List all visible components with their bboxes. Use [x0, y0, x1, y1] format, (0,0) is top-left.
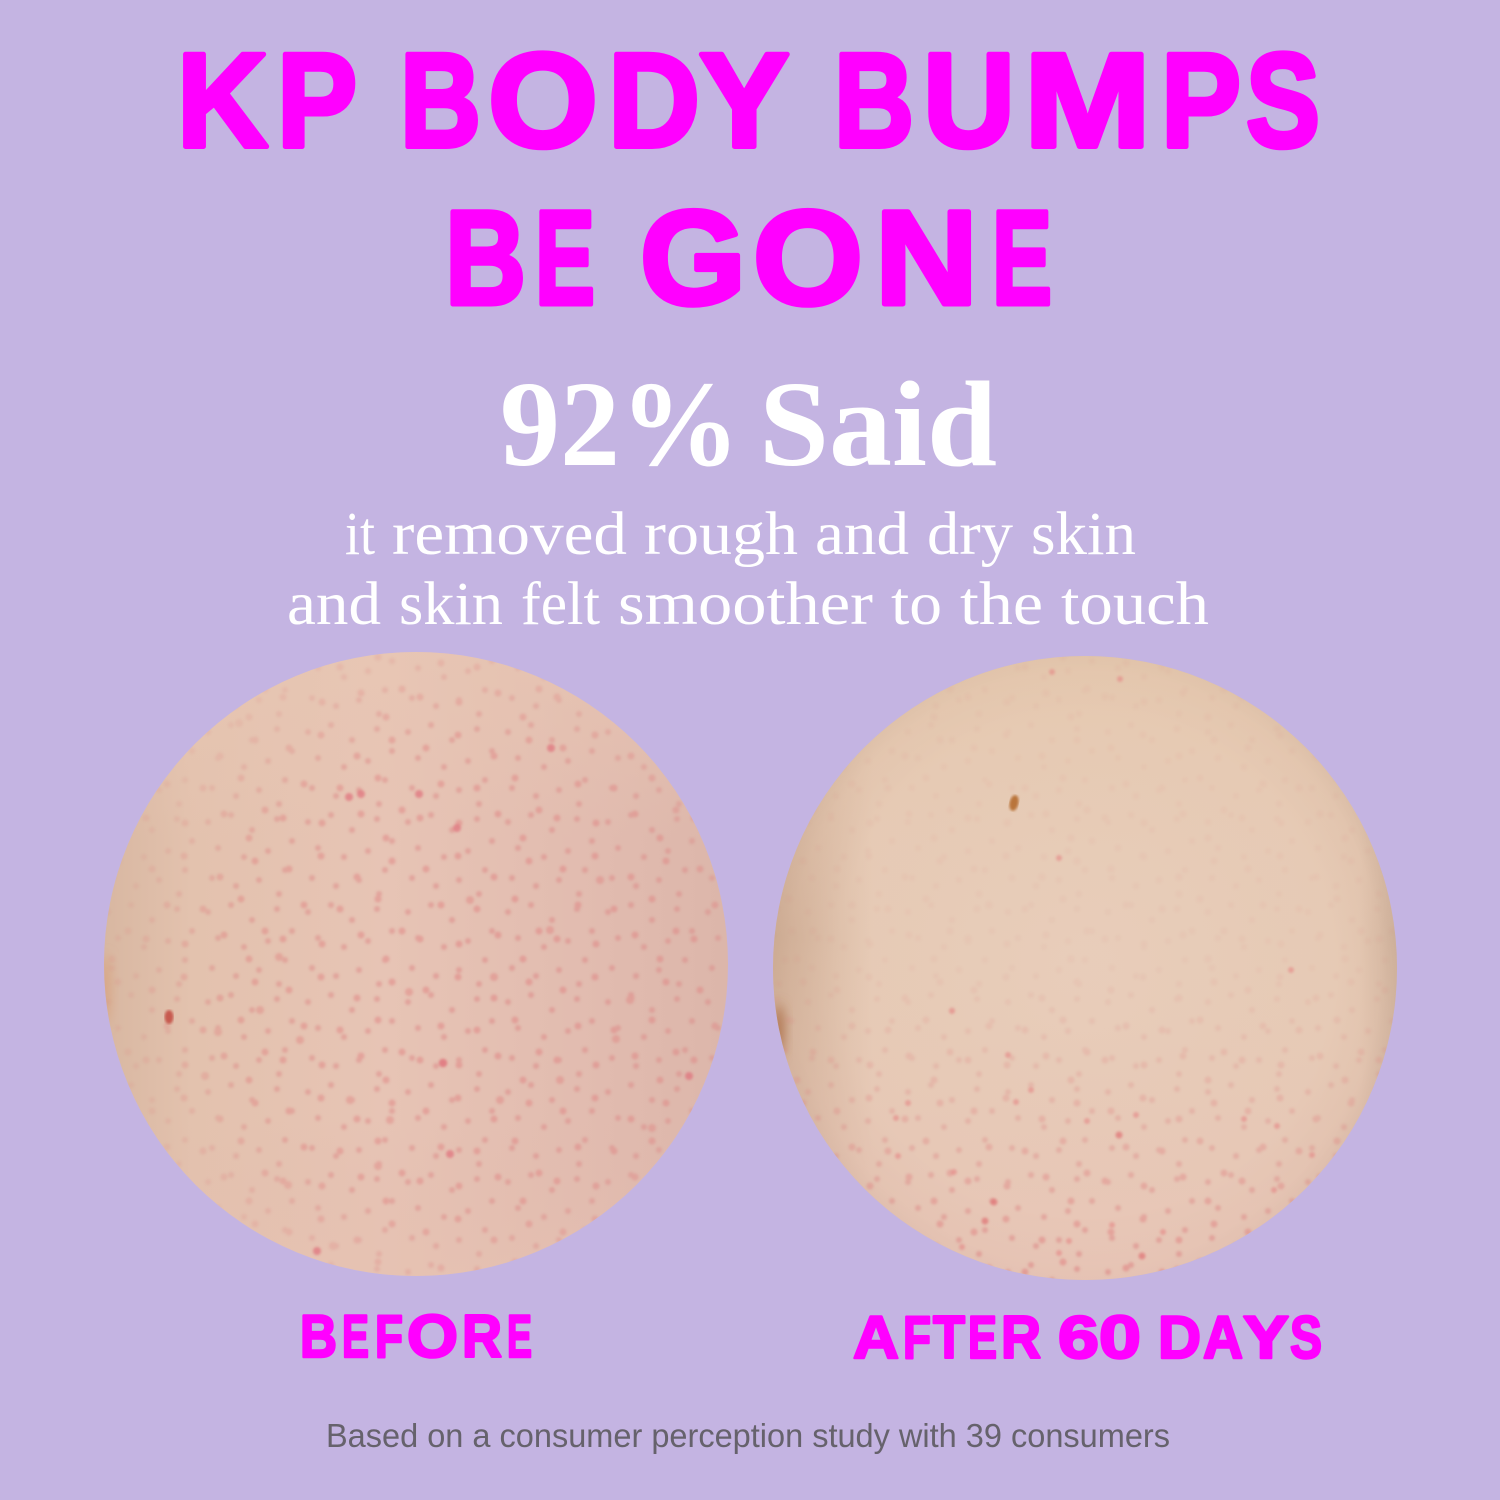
before photo [99, 652, 728, 1276]
subheading text: dry [927, 501, 1014, 568]
title: M [1024, 26, 1151, 176]
title: K [177, 26, 268, 176]
after label: T [933, 1304, 965, 1371]
title: U [923, 26, 1015, 176]
subheading text: rough [644, 501, 798, 568]
mole [164, 1010, 174, 1024]
title: B [445, 184, 526, 333]
after label: Y [1243, 1304, 1289, 1371]
after label: F [903, 1304, 931, 1371]
title [177, 26, 1320, 333]
before label: B [300, 1303, 337, 1370]
title: O [753, 184, 863, 333]
after label: 6 [1058, 1304, 1099, 1371]
subheading text: the [960, 571, 1043, 638]
title: N [875, 184, 978, 333]
subheading text: felt [521, 571, 600, 638]
after label: S [1290, 1304, 1322, 1371]
title: E [535, 184, 595, 333]
subheading text: removed [392, 501, 627, 568]
subheading text: touch [1061, 571, 1209, 638]
title: O [488, 26, 598, 176]
title: B [834, 26, 914, 176]
footnote: Based on a consumer perception study with 39 consumers [326, 1417, 1170, 1454]
subheading text: and [287, 571, 381, 638]
subheading text: to [891, 571, 942, 638]
after label: A [853, 1304, 899, 1371]
red bumps [317, 748, 689, 1251]
subheading text: skin [1031, 501, 1136, 568]
subheading text: and [815, 501, 909, 568]
title: P [1161, 26, 1241, 176]
before label: F [375, 1303, 403, 1370]
title: Y [699, 26, 788, 176]
after label: R [1001, 1304, 1041, 1371]
before label: E [342, 1303, 369, 1370]
statistic heading: 92% [500, 357, 740, 492]
before label: R [462, 1303, 502, 1370]
after label: A [1203, 1304, 1243, 1371]
red bumps [896, 672, 1312, 1253]
before label: E [507, 1303, 532, 1370]
title: E [992, 184, 1052, 333]
subheading text [287, 501, 1209, 638]
after label: 0 [1099, 1304, 1141, 1371]
before label: O [407, 1303, 458, 1370]
title: G [640, 184, 746, 333]
subheading text: smoother [618, 571, 873, 638]
subheading text: skin [399, 571, 503, 638]
statistic heading: Said [759, 357, 997, 492]
title: S [1246, 26, 1320, 176]
title: D [608, 26, 700, 176]
subheading text: it [345, 501, 375, 568]
mole [1008, 794, 1020, 812]
after photo [773, 656, 1397, 1280]
after label: E [968, 1304, 997, 1371]
title: P [277, 26, 355, 176]
after label: D [1158, 1304, 1201, 1371]
title: B [400, 26, 481, 176]
